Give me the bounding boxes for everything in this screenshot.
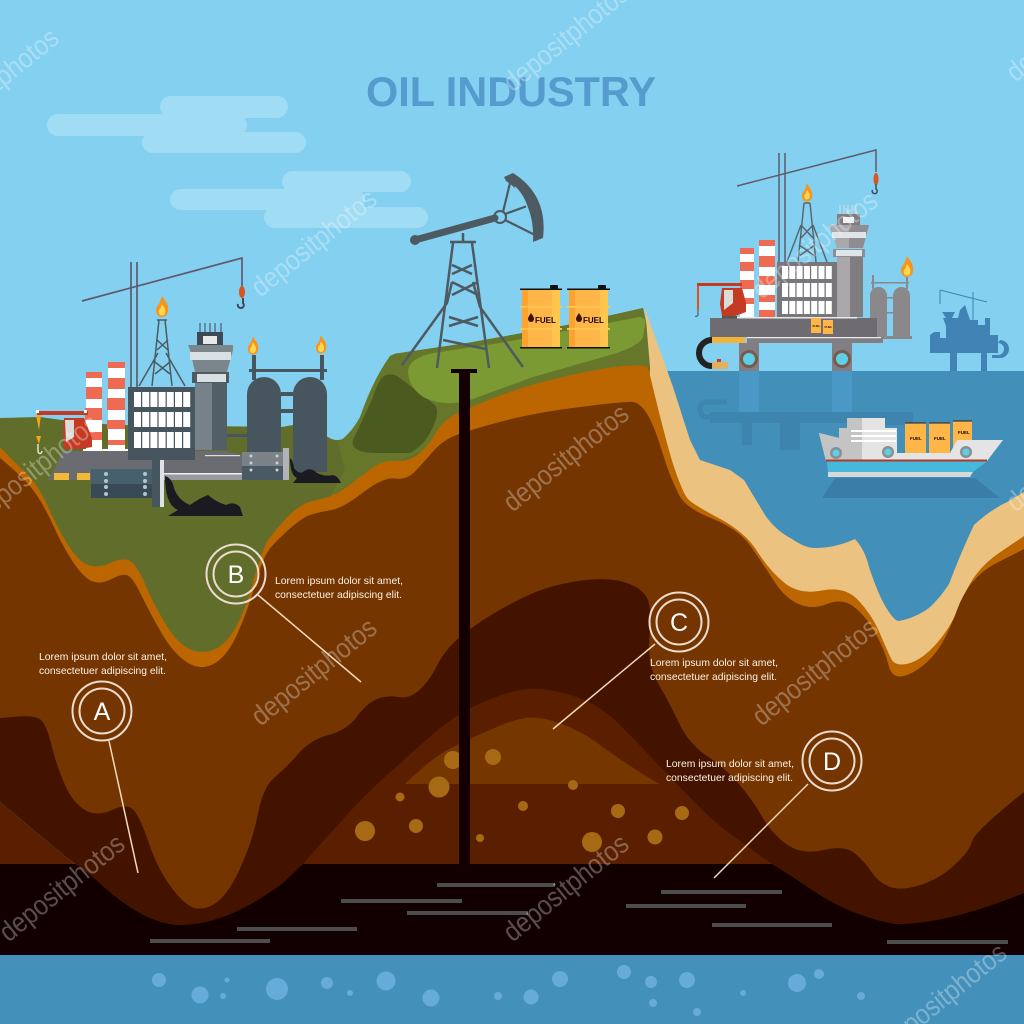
callout B: [206, 544, 403, 682]
oil pocket inner dome: [405, 718, 659, 784]
rig accommodation building: [777, 262, 837, 318]
oil-bearing black layer: [0, 864, 1024, 955]
stock watermarks: depositphotos: [497, 398, 635, 517]
rig hose and valve: [699, 340, 728, 369]
offshore oil rig: [695, 150, 913, 371]
oil spill large: [165, 476, 243, 516]
cloud group two: [170, 171, 428, 228]
callout D: [666, 732, 862, 878]
pump jack tower: [402, 233, 523, 368]
callout A: A: [94, 698, 111, 726]
barrel two: FUEL: [583, 316, 604, 325]
callout B: B: [228, 561, 244, 589]
cargo ship: [819, 418, 1003, 477]
rig crane: [737, 150, 878, 263]
refinery derrick with flare: [139, 296, 185, 386]
ship fuel barrels: FUEL: [934, 436, 946, 441]
hill: dark patch: [353, 374, 437, 453]
title: OIL INDUSTRY: [366, 68, 656, 115]
refinery riveted tank box: [91, 460, 164, 507]
callout C: [553, 592, 778, 729]
main brown soil layer: [0, 402, 1024, 909]
underground water layer: [0, 955, 1024, 1024]
distant rig silhouette: [930, 290, 1009, 371]
refinery right riveted box: [242, 448, 289, 480]
refinery crane: [82, 258, 245, 388]
callout D: D: [823, 748, 841, 776]
ship hull: [819, 433, 1003, 477]
callout B: consectetuer adipiscing elit.: [275, 589, 402, 601]
dark rock layer: [0, 565, 1024, 925]
oil seams in black layer: [150, 883, 1008, 944]
orange clay layer: [0, 365, 1024, 720]
pump jack horse head: [503, 173, 544, 242]
refinery main building: [128, 387, 195, 460]
sea: [640, 371, 1024, 701]
refinery excavator: [36, 410, 92, 454]
callout A: Lorem ipsum dolor sit amet,: [39, 651, 167, 663]
callout D: Lorem ipsum dolor sit amet,: [666, 758, 794, 770]
callout B: Lorem ipsum dolor sit amet,: [275, 575, 403, 587]
refinery control tower: [188, 323, 233, 450]
callout C: C: [670, 609, 688, 637]
fuel barrels on the hill: [520, 285, 610, 348]
ship superstructure: [839, 418, 897, 453]
hill: light green top: [408, 317, 645, 403]
rig barrels: FUEL: [824, 325, 832, 329]
rig barrels: FUEL: [812, 324, 820, 328]
onshore pump jack: [402, 173, 544, 368]
barrel one: FUEL: [535, 316, 556, 325]
land: green ground: [0, 308, 650, 700]
cloud group one: [47, 96, 306, 153]
central anticline medium rock dome: [303, 689, 772, 864]
callout A: consectetuer adipiscing elit.: [39, 665, 166, 677]
water bubbles: [152, 965, 865, 1016]
rig chimneys: [740, 240, 775, 317]
rig reflection in sea: [700, 371, 1000, 498]
rig gas tanks with flare: [870, 256, 913, 339]
stock watermarks: depositphotos: [245, 612, 383, 731]
pump jack walking beam: [410, 211, 506, 245]
sand layer: [640, 308, 1024, 700]
rig barrels: [811, 318, 833, 334]
refinery gas tanks with flares: [227, 336, 327, 473]
left medium rock wedge: [0, 802, 75, 864]
rig flare derrick: [787, 184, 827, 262]
refinery platform: [48, 451, 252, 480]
hill: mid olive slope: [330, 308, 650, 497]
stock watermarks: depositphotos: [746, 185, 884, 304]
oil bubbles: [355, 749, 689, 852]
stock watermarks: depositphotos: [746, 612, 884, 731]
refinery chimneys: [83, 362, 129, 452]
oil spill small: [290, 458, 341, 483]
callout C: consectetuer adipiscing elit.: [650, 671, 777, 683]
ship fuel barrels: FUEL: [958, 430, 970, 435]
callout C: Lorem ipsum dolor sit amet,: [650, 657, 778, 669]
ship fuel barrels: [905, 421, 972, 453]
sky background: [0, 0, 1024, 700]
rig excavator: [695, 283, 746, 318]
stock watermarks: depositphotos: [245, 183, 383, 302]
callout A: [39, 651, 167, 873]
well pipe: [451, 369, 477, 865]
onshore refinery: [36, 258, 341, 516]
ship fuel barrels: FUEL: [910, 436, 922, 441]
rig deck and legs: [710, 317, 883, 371]
stock watermarks: depositphotos: [497, 828, 635, 947]
callout D: consectetuer adipiscing elit.: [666, 772, 793, 784]
rig control tower: [829, 205, 869, 317]
